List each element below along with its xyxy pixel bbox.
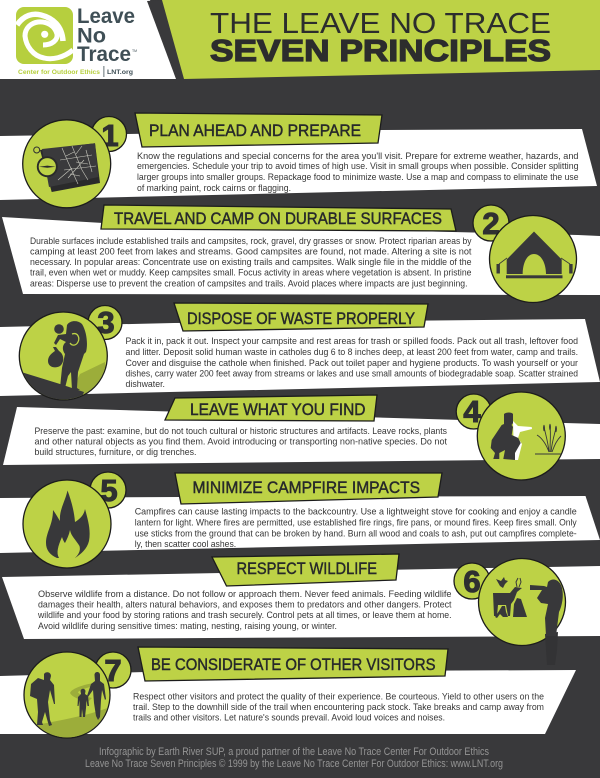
footer credits: Infographic by Earth River SUP, a proud partner of the Leave No Trace Center For Outdoor Ethics <box>99 746 489 758</box>
number 5 <box>90 472 126 508</box>
panel: principle 3 <box>0 303 600 402</box>
text 6 <box>37 589 452 631</box>
text 3: Pack it in, pack it out. Inspect your campsite and rest areas for trash or spilled foods. Pack out all trash, leftover food <box>126 336 578 346</box>
heading 1: PLAN AHEAD AND PREPARE <box>149 121 361 140</box>
text 2: trail, even when wet or muddy. Keep campsites small. Focus activity in areas where vegetation is absent. In pristine <box>30 268 472 278</box>
panel: principle 7 <box>0 647 576 740</box>
heading 6: RESPECT WILDLIFE <box>236 559 377 578</box>
text 1: of marking paint, rock cairns or flagging. <box>137 183 291 193</box>
adult with backpack <box>30 672 55 726</box>
text 7: trail. Step to the downhill side of the trail when encountering pack stock. Take breaks and camp away from <box>133 702 544 712</box>
footer credits <box>85 746 503 770</box>
text 3: dishes, carry water 200 feet away from streams or lakes and use small amounts of biodegradable soap. Scatter strained <box>126 368 578 378</box>
panel: principle 4 <box>3 392 600 480</box>
heading 1 <box>135 113 382 147</box>
text 4 <box>34 426 447 457</box>
number 7 <box>95 652 131 688</box>
number 4: 4 <box>463 394 481 429</box>
text 4: build structures, furniture, or dig trenches. <box>34 447 196 457</box>
text 5: use sticks from the ground that can be broken by hand. Burn all wood and coals to ash, put out campfires complete- <box>135 528 577 538</box>
text 2: Durable surfaces include established trails and campsites, rock, gravel, dry grasses or snow. Protect riparian areas by <box>30 236 472 246</box>
text 5: Campfires can cause lasting impacts to the backcountry. Use a lightweight stove for cooking and enjoy a candle <box>135 506 577 516</box>
child <box>78 689 89 717</box>
heading 5: MINIMIZE CAMPFIRE IMPACTS <box>192 478 420 497</box>
number 7: 7 <box>104 653 122 688</box>
panel: principle 1 <box>0 113 597 208</box>
number 5: 5 <box>100 473 118 508</box>
heading 4: LEAVE WHAT YOU FIND <box>190 400 366 419</box>
heading 2: TRAVEL AND CAMP ON DURABLE SURFACES <box>114 209 442 228</box>
text 2: areas: Disperse use to prevent the creation of campsites and trails. Avoid places where impacts are just beginning. <box>30 278 468 288</box>
text 7: trails and other visitors. Let nature's sounds prevail. Avoid loud voices and noises. <box>133 712 445 722</box>
text 6: Avoid wildlife during sensitive times: mating, nesting, raising young, or winter. <box>38 621 337 631</box>
text 6: wildlife and your food by storing rations and trash securely. Control pets at all times, or leave them at home. <box>37 610 451 620</box>
text 5 <box>135 506 577 549</box>
panel: principle 2 <box>2 205 600 302</box>
panel: principle 6 <box>2 554 600 665</box>
deer <box>493 587 522 616</box>
icon: wildlife and woman with binoculars <box>478 558 566 665</box>
heading 3: DISPOSE OF WASTE PROPERLY <box>187 309 415 328</box>
footer credits: Leave No Trace Seven Principles © 1999 by the Leave No Trace Center For Outdoor Ethics: www.LNT.org <box>85 758 503 770</box>
text 3 <box>126 336 578 389</box>
number 4 <box>456 394 491 429</box>
logo tagline <box>18 66 133 77</box>
icon: map and compass <box>23 120 111 208</box>
heading 2 <box>101 205 456 231</box>
text 1: emergencies. Schedule your trip to avoid times of high use. Visit in small groups when possible. Consider splitting <box>137 161 578 171</box>
heading 6 <box>212 554 399 586</box>
text 1: Know the regulations and special concerns for the area you'll visit. Prepare for extreme weather, hazards, and <box>137 151 578 161</box>
woman <box>545 632 558 665</box>
logo mark <box>16 7 73 64</box>
text 7: Respect other visitors and protect the quality of their experience. Be courteous. Yield to other users on the <box>133 692 544 702</box>
title: THE LEAVE NO TRACE <box>210 8 551 40</box>
heading 4 <box>165 395 377 421</box>
hiker silhouette <box>54 321 87 390</box>
text 6: damages their health, alters natural behaviors, and exposes them to predators and other dangers. Protect <box>38 600 452 610</box>
title <box>210 8 551 68</box>
logo wordmark: Leave <box>77 4 135 28</box>
icon: hiker with trash bag <box>18 312 107 402</box>
title: SEVEN PRINCIPLES <box>210 33 551 68</box>
heading 3 <box>174 303 428 331</box>
icon: crouching man and reeds <box>477 392 565 480</box>
logo <box>16 4 137 77</box>
text 3: Cover and disguise the cathole when finished. Pack out toilet paper and hygiene products. To wash yourself or your <box>126 358 578 368</box>
heading 7: BE CONSIDERATE OF OTHER VISITORS <box>151 655 436 674</box>
icon: flame <box>23 480 111 568</box>
text 6: Observe wildlife from a distance. Do not follow or approach them. Never feed animals. Feeding wildlife <box>38 589 451 599</box>
text 3: and litter. Deposit solid human waste in catholes dug 6 to 8 inches deep, at least 200 feet from water, camp and trails. <box>126 347 578 357</box>
text 4: and other natural objects as you find them. Avoid introducing or transporting non-native species. Do not <box>34 436 447 446</box>
text 1 <box>137 151 578 193</box>
text 4: Preserve the past: examine, but do not touch cultural or historic structures and artifacts. Leave rocks, plants <box>34 426 447 436</box>
bird <box>496 577 508 588</box>
text 2 <box>30 236 472 288</box>
number 1 <box>92 116 126 153</box>
number 2: 2 <box>482 206 500 241</box>
number 3: 3 <box>97 305 115 340</box>
logo tagline: Center for Outdoor Ethics <box>18 69 101 76</box>
logo wordmark: Trace <box>77 42 131 66</box>
text 3: dishwater. <box>126 379 165 389</box>
icon: tent <box>490 216 576 302</box>
icon: family of hikers <box>20 652 112 740</box>
text 2: camping at least 200 feet from lakes and streams. Good campsites are found, not made. Altering a site is not <box>30 246 472 256</box>
text 1: larger groups into smaller groups. Repackage food to minimize waste. Use a map and compass to eliminate the use <box>137 172 578 182</box>
text 5: ly, then scatter cool ashes. <box>135 539 236 549</box>
header <box>0 0 600 79</box>
logo wordmark: TM <box>132 49 137 53</box>
number 3 <box>88 305 122 340</box>
logo tagline: LNT.org <box>107 69 133 76</box>
panel: principle 5 <box>0 472 600 568</box>
number 6: 6 <box>463 564 481 599</box>
text 5: lantern for light. Where fires are permitted, use established fire rings, fire pans, or mound fires. Keep fires small. Only <box>135 518 577 528</box>
adult <box>87 672 106 720</box>
number 2 <box>473 205 509 241</box>
number 1: 1 <box>101 118 119 153</box>
logo wordmark <box>77 4 137 66</box>
heading 7 <box>138 647 448 681</box>
cat <box>495 606 508 618</box>
heading 5 <box>175 473 442 504</box>
logo wordmark: No <box>77 24 106 48</box>
text 7 <box>133 692 544 722</box>
text 2: necessary. In popular areas: Concentrate use on existing trails and campsites. Walk single file in the middle of the <box>30 257 472 267</box>
number 6 <box>454 563 490 599</box>
dog <box>513 598 527 617</box>
